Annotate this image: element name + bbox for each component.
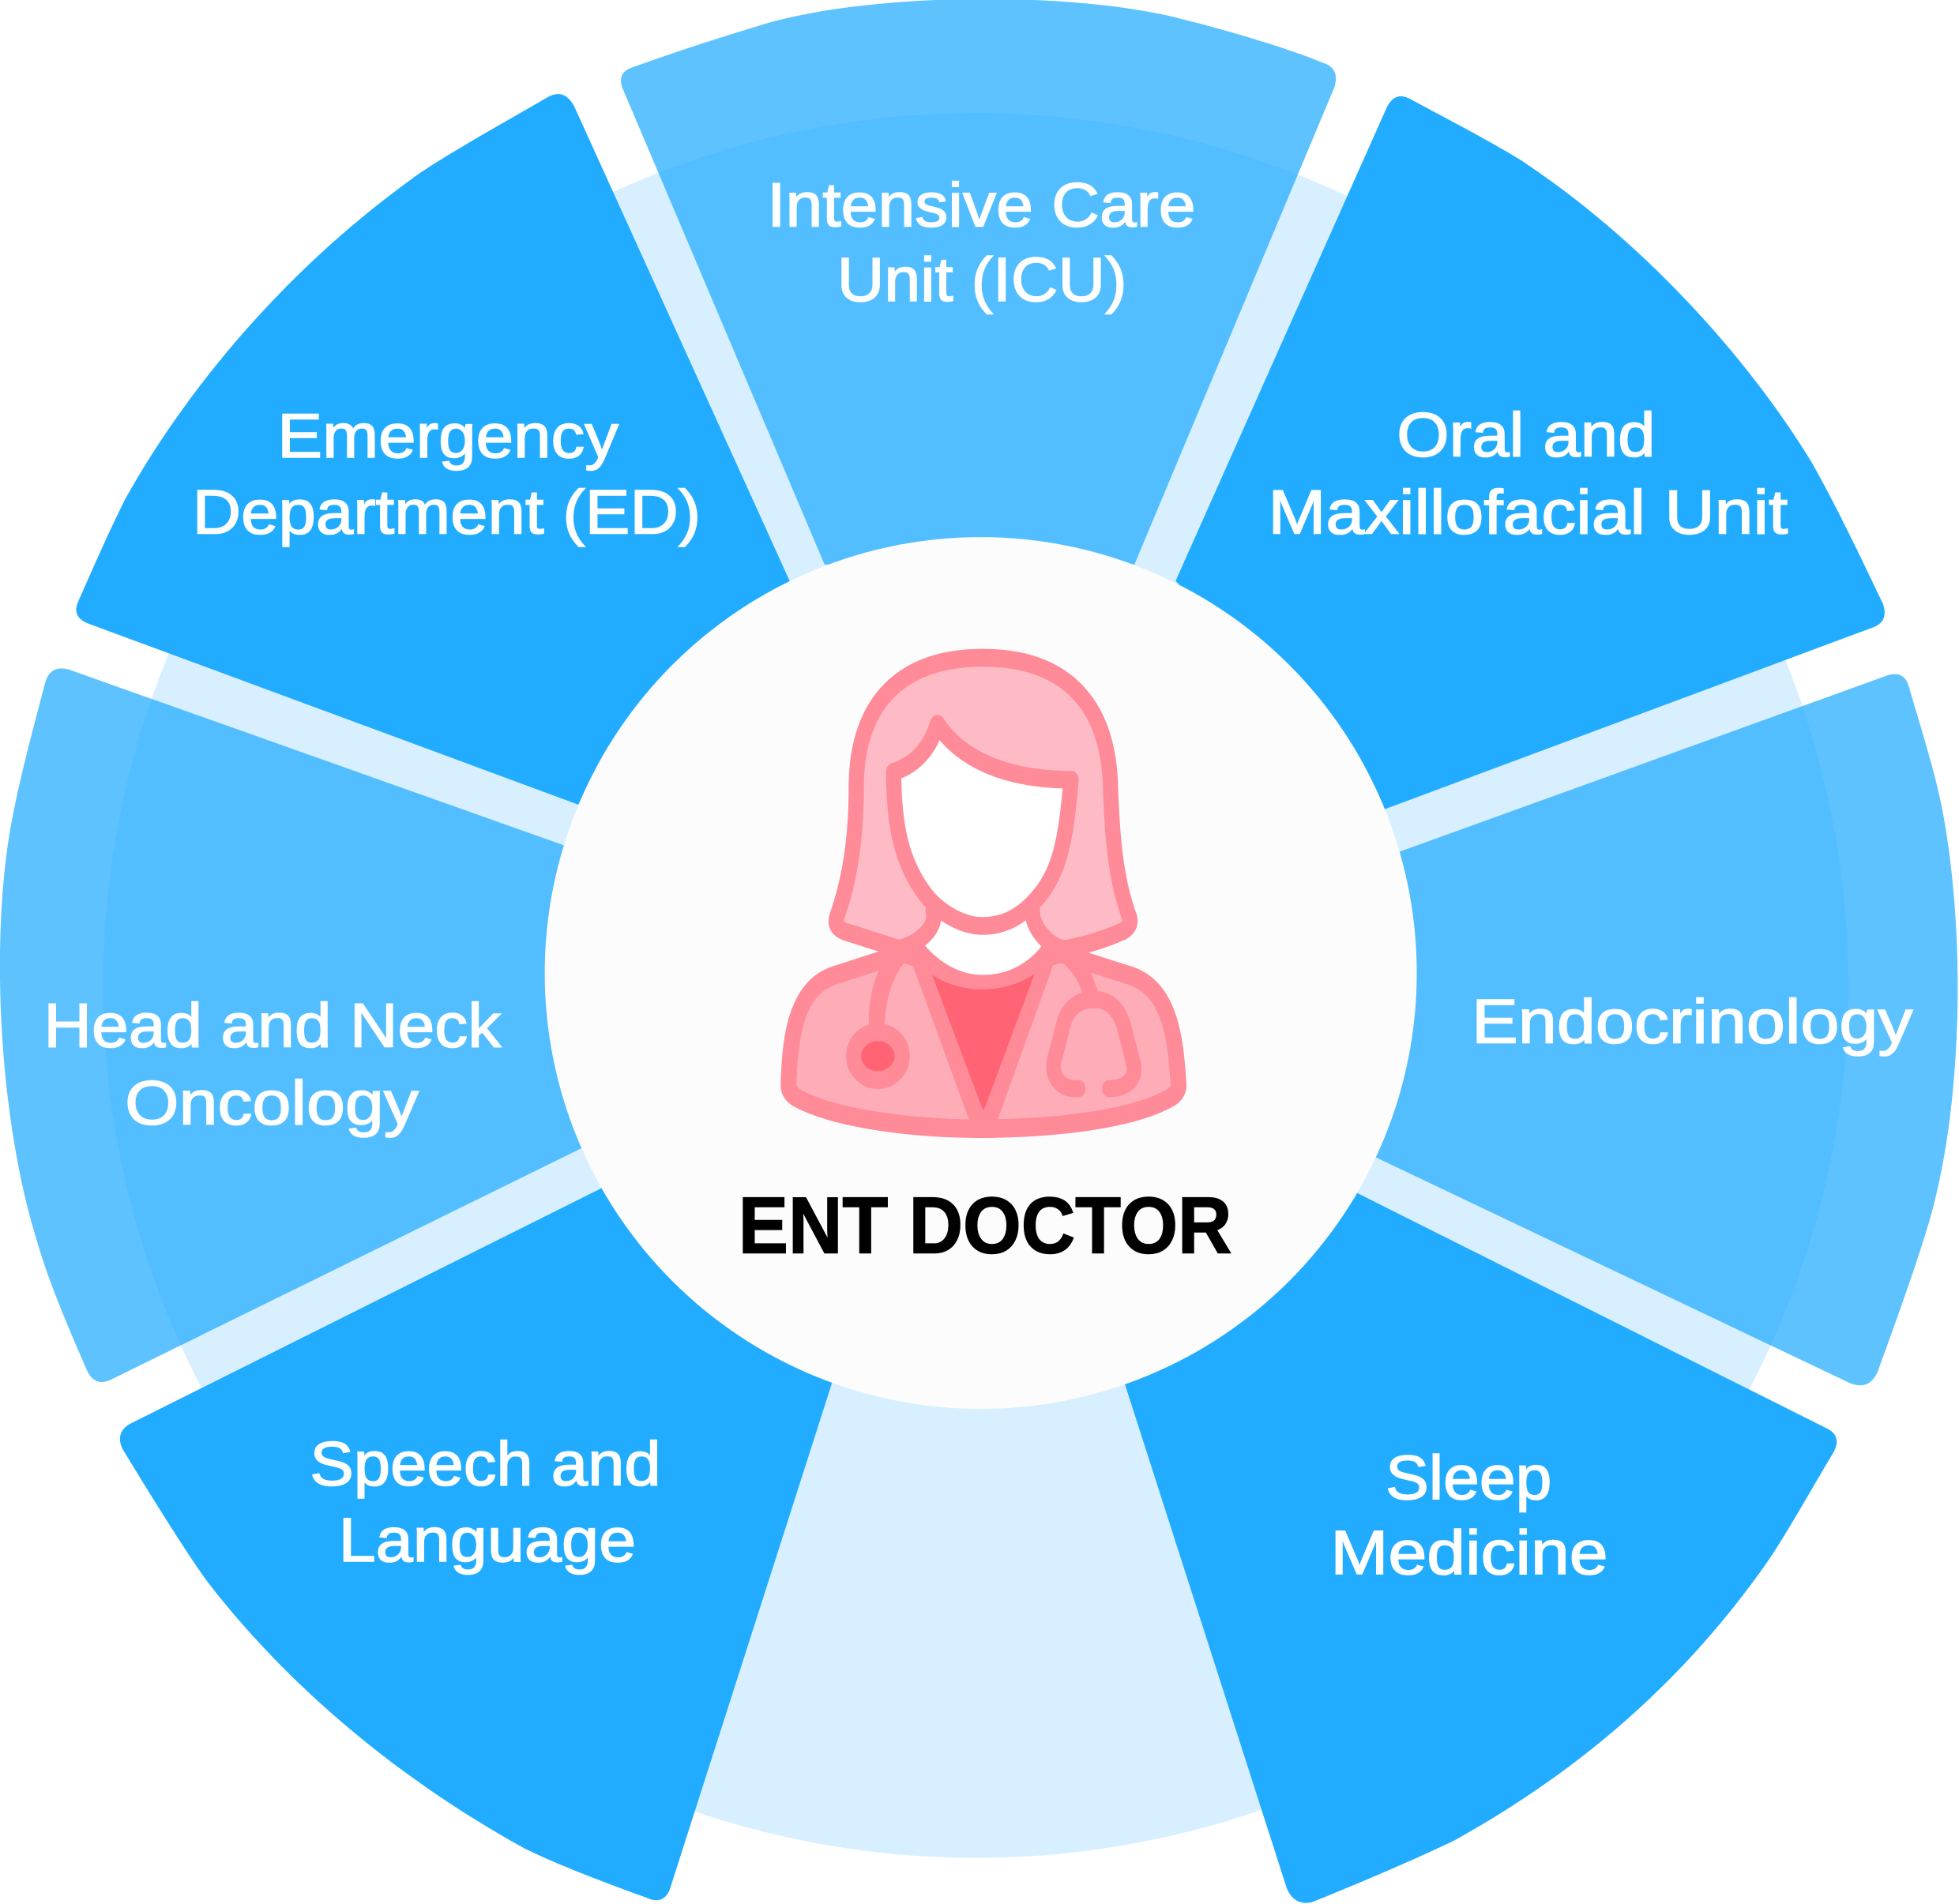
segment: Head and Neck Oncology: Oncology xyxy=(125,1067,419,1137)
icon: female doctor xyxy=(788,658,1179,1129)
stethoscope left tube and chest piece xyxy=(854,950,908,1080)
segment: Intensive Care Unit xyxy=(621,0,1336,565)
segment: Intensive Care Unit: Intensive Care xyxy=(767,169,1196,239)
segment: Emergency Department xyxy=(76,94,790,806)
segment: Speech and Language: Language xyxy=(339,1504,636,1575)
collar lapels xyxy=(908,941,1058,1123)
hair xyxy=(836,658,1130,949)
segment: Endocrinology: Endocrinology xyxy=(1472,986,1913,1057)
title: ENT DOCTOR: ENT DOCTOR xyxy=(739,1181,1231,1270)
segment: Oral and Maxillofacial Unit: Maxillofacial Unit xyxy=(1268,476,1788,546)
segment: Speech and Language: Speech and xyxy=(310,1429,661,1499)
segment: Endocrinology xyxy=(1374,674,1957,1385)
segment: Sleep Medicine xyxy=(1124,1192,1837,1903)
center circle xyxy=(545,537,1417,1409)
stethoscope right tube and earpieces xyxy=(1054,952,1134,1089)
shirt triangle xyxy=(932,974,1035,1110)
segment: Head and Neck Oncology: Head and Neck xyxy=(43,990,502,1060)
segment: Sleep Medicine: Sleep xyxy=(1386,1442,1551,1512)
segment: Oral and Maxillofacial Unit xyxy=(1175,96,1885,809)
coat xyxy=(788,953,1179,1129)
segment: Emergency Department: Department (ED) xyxy=(193,476,701,546)
face xyxy=(893,724,1071,926)
segment: Intensive Care Unit: Unit (ICU) xyxy=(837,244,1127,314)
segment: Oral and Maxillofacial Unit: Oral and xyxy=(1397,399,1656,469)
neck xyxy=(925,918,1042,975)
segment: Emergency Department: Emergency xyxy=(277,400,619,471)
segment: Sleep Medicine: Medicine xyxy=(1330,1517,1608,1587)
segment: Head and Neck Oncology xyxy=(0,668,582,1382)
segment: Speech and Language xyxy=(120,1188,832,1900)
